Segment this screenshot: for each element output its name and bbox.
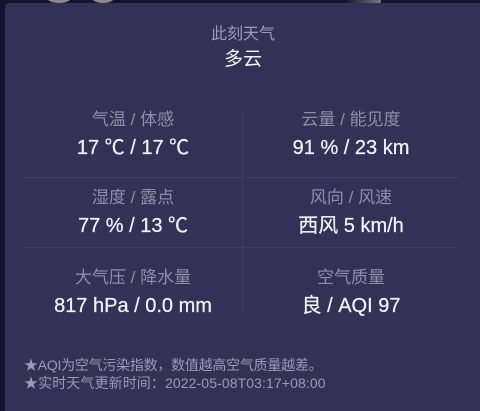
top strip: partial circles bbox=[48, 0, 381, 3]
metric: pressure and precipitation: 817 hPa / 0.0 mm bbox=[54, 295, 212, 317]
metric: cloud cover and visibility bbox=[293, 110, 409, 159]
metric: humidity and dew point: 湿度 / 露点 bbox=[92, 188, 174, 207]
heading: current weather: 此刻天气 bbox=[211, 26, 275, 43]
metric: wind: 西风 5 km/h bbox=[298, 215, 404, 237]
footnote: AQI explanation: ★AQI为空气污染指数，数值越高空气质量越差。 bbox=[24, 357, 322, 373]
metric: air quality: 空气质量 bbox=[317, 268, 385, 287]
weather condition: 多云 bbox=[224, 49, 262, 70]
metric: temperature: 17 ℃ / 17 ℃ bbox=[77, 137, 189, 159]
metric: pressure and precipitation: 大气压 / 降水量 bbox=[75, 268, 191, 287]
metric: humidity and dew point: 77 % / 13 ℃ bbox=[78, 215, 188, 237]
metric: temperature: 气温 / 体感 bbox=[92, 110, 174, 129]
metric: wind bbox=[298, 188, 404, 237]
metric: wind: 风向 / 风速 bbox=[310, 188, 392, 207]
metric: cloud cover and visibility: 云量 / 能见度 bbox=[301, 110, 401, 129]
metric: pressure and precipitation bbox=[54, 268, 212, 317]
metric: temperature bbox=[77, 110, 189, 159]
metric: humidity and dew point bbox=[78, 188, 188, 237]
footnote: update time: ★实时天气更新时间：2022-05-08T03:17+08:00 bbox=[24, 375, 326, 391]
metric: air quality: 良 / AQI 97 bbox=[302, 295, 400, 317]
metric: air quality bbox=[302, 268, 400, 317]
metric: cloud cover and visibility: 91 % / 23 km bbox=[293, 137, 409, 159]
